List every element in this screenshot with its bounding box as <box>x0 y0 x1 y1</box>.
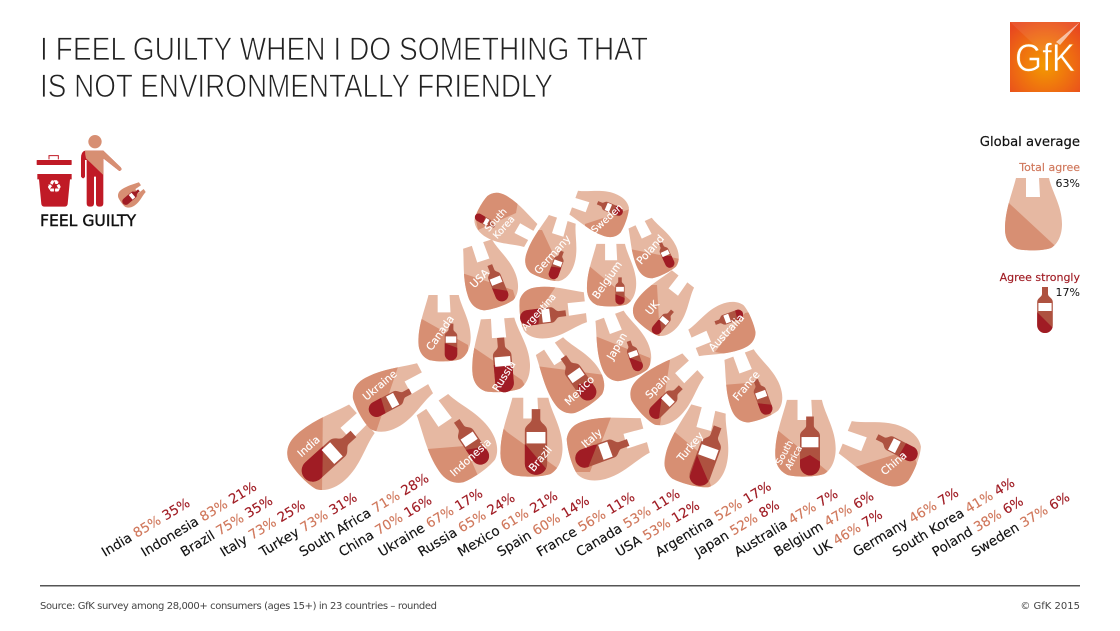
bag: Ukraine: Ukraine <box>361 368 399 403</box>
bag: Mexico: Mexico <box>563 374 597 408</box>
label: feel guilty: FEEL GUILTY <box>40 212 136 230</box>
bag: Australia <box>688 302 756 356</box>
label: South Africa: South Africa 71% 28% <box>297 471 432 560</box>
bag: South Africa <box>775 400 836 477</box>
label: USA: USA 53% 12% <box>613 499 703 560</box>
bag: Mexico <box>536 337 604 414</box>
bag: India: India <box>295 434 323 460</box>
bag: USA <box>463 240 518 310</box>
bag: Italy: Italy <box>579 427 605 451</box>
icon: recycling bin: ♻ <box>47 177 62 197</box>
bag: Sweden: Sweden <box>589 202 625 236</box>
bag: Belgium <box>585 244 636 312</box>
bag: Canada <box>415 295 471 365</box>
label: Turkey: Turkey 73% 31% <box>256 490 360 561</box>
label: Germany: Germany 46% 7% <box>851 486 962 560</box>
bag: Ukraine <box>352 363 433 432</box>
bag: Belgium: Belgium <box>590 259 625 301</box>
bag: India <box>287 404 374 490</box>
bag: UK: UK <box>643 298 663 318</box>
legend: total agree label: Total agree <box>1018 161 1080 174</box>
bag: Poland <box>628 218 679 278</box>
title: I FEEL GUILTY WHEN I DO SOMETHING THAT <box>40 31 648 67</box>
bag: Brazil <box>500 398 562 477</box>
legend: agree strongly label: Agree strongly <box>1000 271 1080 284</box>
legend: bag <box>1005 178 1062 250</box>
label: Ukraine: Ukraine 67% 17% <box>376 486 486 560</box>
legend heading: Global average <box>980 135 1080 150</box>
bag: Argentina: Argentina <box>520 292 559 333</box>
legend: total agree value: 63% <box>1056 177 1080 190</box>
bag: Germany <box>525 215 576 282</box>
label: Russia: Russia 65% 24% <box>416 491 518 560</box>
label: Canada: Canada 53% 11% <box>574 487 683 560</box>
label: Spain: Spain 60% 14% <box>495 494 592 560</box>
icon: person <box>81 135 122 207</box>
bag: Argentina <box>519 286 587 338</box>
label: Sweden: Sweden 37% 6% <box>969 490 1073 560</box>
label: China: China 70% 16% <box>337 493 435 560</box>
label: Mexico: Mexico 61% 21% <box>455 489 561 560</box>
bag: Germany: Germany <box>532 233 573 277</box>
bag: Spain: Spain <box>643 372 672 401</box>
logo: GfK <box>1010 22 1080 92</box>
bag: USA: USA <box>468 266 492 291</box>
bag: France <box>724 349 782 422</box>
label: Australia: Australia 47% 7% <box>732 487 841 560</box>
bag: South Korea <box>474 192 538 247</box>
bag: South Africa: Africa <box>784 444 805 472</box>
label: Brazil: Brazil 75% 35% <box>178 494 276 560</box>
bag: Indonesia <box>416 394 498 483</box>
title <box>40 31 648 104</box>
bag: Turkey <box>664 404 728 488</box>
bag: Italy <box>566 418 650 480</box>
bag: South Korea: Korea <box>491 214 517 241</box>
bag: Australia: Australia <box>707 312 747 354</box>
label: Poland: Poland 38% 6% <box>930 494 1026 560</box>
bag: Spain <box>630 354 704 426</box>
label: Japan: Japan 52% 8% <box>691 498 783 561</box>
label: UK: UK 46% 7% <box>811 508 886 560</box>
legend: global average <box>980 135 1080 340</box>
bag: Japan <box>596 310 652 382</box>
chart: bags by country <box>278 181 928 500</box>
bag: Japan: Japan <box>604 331 630 363</box>
bag: China <box>838 421 921 486</box>
label: France: France 56% 11% <box>534 490 638 560</box>
legend: agree strongly value: 17% <box>1056 286 1080 299</box>
footer: copyright: © GfK 2015 <box>1020 601 1080 612</box>
icon: small bag <box>115 179 148 211</box>
bag: Sweden <box>570 190 629 238</box>
icon: feel guilty <box>37 135 148 230</box>
bag: Indonesia: Indonesia <box>448 436 494 479</box>
bag: Poland: Poland <box>635 233 667 267</box>
label: South Korea: South Korea 41% 4% <box>890 476 1018 560</box>
label: India: India 85% 35% <box>99 496 193 560</box>
title: IS NOT ENVIRONMENTALLY FRIENDLY <box>40 68 553 104</box>
bag: Russia <box>472 318 530 392</box>
label: Belgium: Belgium 47% 6% <box>772 489 877 560</box>
bag: South Africa: South <box>775 439 796 467</box>
bag: Canada: Canada <box>424 313 457 353</box>
footer: source: Source: GfK survey among 28,000+ consumers (ages 15+) in 23 countries – rounded <box>40 601 437 612</box>
bag: China: China <box>879 449 909 478</box>
bag: Russia: Russia <box>490 359 518 394</box>
country value labels <box>99 471 1073 561</box>
bag: Brazil: Brazil <box>527 444 555 474</box>
bag: Turkey: Turkey <box>674 430 706 465</box>
bag: UK <box>632 270 694 336</box>
bag: South Korea: South <box>483 206 509 234</box>
label: Argentina: Argentina 52% 17% <box>653 479 774 560</box>
bag: France: France <box>731 369 763 403</box>
label: Italy: Italy 73% 25% <box>218 498 308 560</box>
logo: GfK: GfK <box>1015 37 1075 80</box>
label: Indonesia: Indonesia 83% 21% <box>139 480 260 560</box>
legend: bottle <box>1037 287 1053 333</box>
